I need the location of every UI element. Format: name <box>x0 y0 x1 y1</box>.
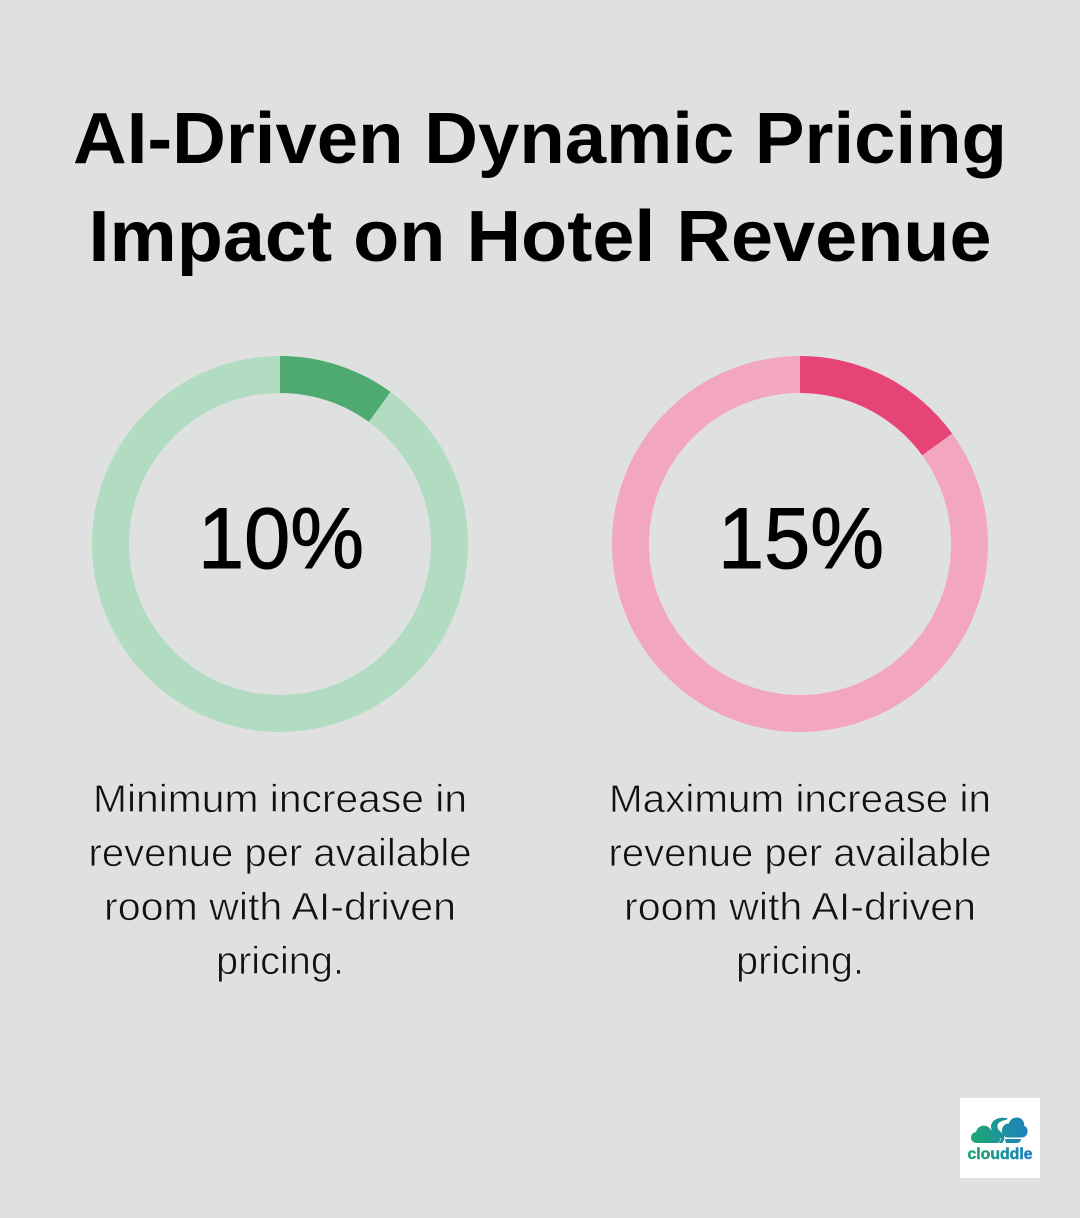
caption: minimum <box>88 778 472 983</box>
caption: minimum: pricing. <box>216 940 344 983</box>
donut chart: 10% <box>110 356 450 714</box>
icon: clouds <box>971 1117 1028 1143</box>
value: 15%: 15% <box>718 491 884 587</box>
caption: maximum: pricing. <box>736 940 864 983</box>
caption: minimum: revenue per available <box>88 832 472 875</box>
caption: minimum: Minimum increase in <box>93 778 467 821</box>
caption: maximum: revenue per available <box>608 832 992 875</box>
title: Impact on Hotel Revenue <box>88 197 991 277</box>
logo: clouddle <box>960 1098 1040 1178</box>
value: 10%: 10% <box>198 491 364 587</box>
donut chart: 15% <box>630 356 970 714</box>
caption: maximum <box>608 778 992 983</box>
caption: minimum: room with AI-driven <box>104 886 456 929</box>
title: AI-Driven Dynamic Pricing <box>73 99 1007 179</box>
panel: maximum increase <box>608 356 992 983</box>
caption: maximum: room with AI-driven <box>624 886 976 929</box>
title <box>73 99 1007 277</box>
logo wordmark: clouddle <box>968 1146 1033 1163</box>
panel: minimum increase <box>88 356 472 983</box>
caption: maximum: Maximum increase in <box>609 778 991 821</box>
